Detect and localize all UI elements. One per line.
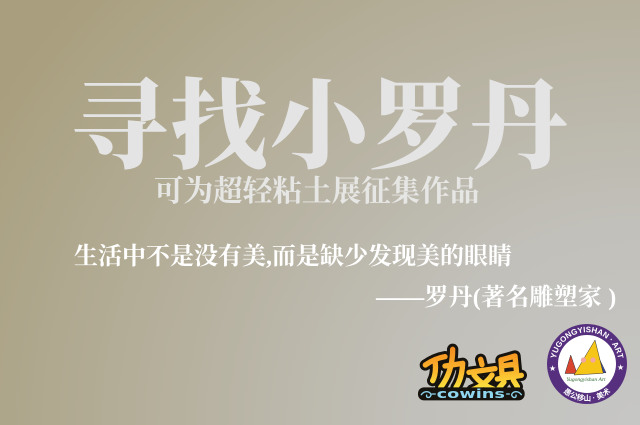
logo: Yugongyishan Art badge xyxy=(547,324,627,404)
badge ring top text: YUGONGYISHAN · ART xyxy=(550,326,624,358)
badge blue sail xyxy=(595,357,606,373)
badge inner circle xyxy=(558,335,616,393)
logo right swirl xyxy=(507,392,521,397)
title: 寻找小罗丹 xyxy=(70,74,570,182)
quote: 生活中不是没有美,而是缺少发现美的眼睛 xyxy=(74,244,512,270)
badge yellow sail xyxy=(574,340,603,375)
badge left star: ★ xyxy=(549,364,556,373)
quote attribution: ——罗丹(著名雕塑家 ) xyxy=(376,285,616,311)
subtitle: 可为超轻粘土展征集作品 xyxy=(154,176,480,208)
logo characters outline xyxy=(425,349,521,390)
badge red sail xyxy=(565,355,577,374)
badge left cheek xyxy=(581,357,586,363)
logo wordmark bar xyxy=(418,387,525,400)
badge small caption: Yugongyishan Art xyxy=(567,377,606,383)
logo wordmark: cowins xyxy=(437,387,505,401)
badge right star: ★ xyxy=(617,363,624,372)
logo: cowins xyxy=(418,344,527,401)
badge ring xyxy=(547,324,627,404)
logo left swirl xyxy=(421,392,435,397)
badge ring bottom text: 愚公移山 · 美术 xyxy=(563,388,610,402)
logo characters fill xyxy=(425,349,521,390)
badge right cheek xyxy=(590,357,596,363)
